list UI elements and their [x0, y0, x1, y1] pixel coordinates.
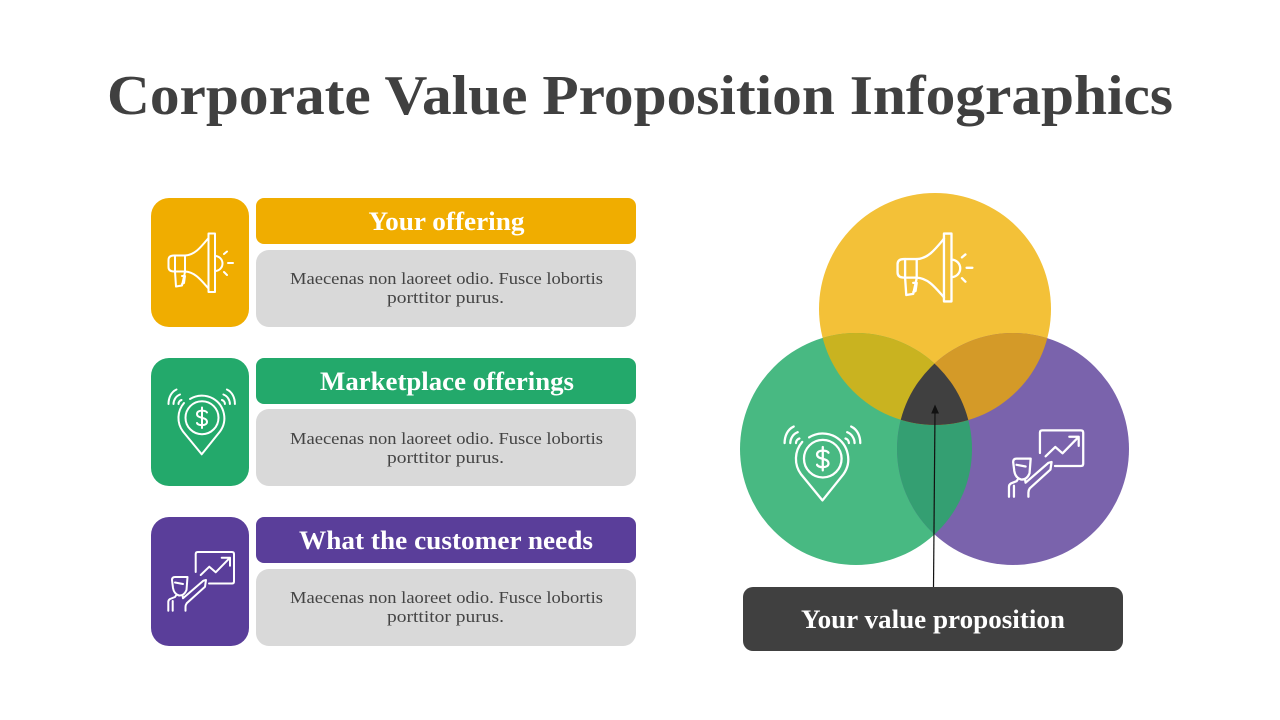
text block: your offering — [256, 250, 636, 327]
overlap: yellow and purple — [900, 333, 1048, 425]
panel: what the customer needs — [151, 517, 636, 646]
header: marketplace offerings: Marketplace offerings — [320, 367, 574, 396]
overlap: green and purple — [897, 420, 972, 534]
text block: what the customer needs: porttitor purus. — [387, 607, 504, 626]
icon: presenter with chart — [1009, 430, 1083, 497]
callout: your value proposition — [743, 587, 1123, 651]
text block: marketplace offerings — [256, 409, 636, 486]
venn diagram — [740, 193, 1129, 565]
header: your offering — [256, 198, 636, 244]
icon tile: presenter with chart — [151, 517, 249, 646]
icon: location pin with dollar — [785, 427, 860, 500]
header: what the customer needs — [256, 517, 636, 563]
text block: marketplace offerings: porttitor purus. — [387, 448, 504, 467]
callout: your value proposition: Your value proposition — [801, 605, 1066, 634]
circle: yellow — [819, 193, 1051, 425]
header: your offering: Your offering — [368, 207, 524, 236]
icon tile: location pin with dollar — [151, 358, 249, 486]
circle: purple — [897, 333, 1129, 565]
panel: marketplace offerings — [151, 358, 636, 486]
overlap: centre — [900, 364, 968, 425]
text block: marketplace offerings: Maecenas non laoreet odio. Fusce lobortis — [290, 429, 603, 448]
icon: megaphone — [898, 234, 972, 301]
arrow: to centre of venn — [931, 404, 939, 587]
overlap: yellow and green — [822, 333, 968, 425]
icon tile: megaphone — [151, 198, 249, 327]
text block: your offering: Maecenas non laoreet odio. Fusce lobortis — [290, 269, 603, 288]
header: marketplace offerings — [256, 358, 636, 404]
text block: what the customer needs — [256, 569, 636, 646]
panel: your offering — [151, 198, 636, 327]
text block: your offering: porttitor purus. — [387, 288, 504, 307]
circle: green — [740, 333, 972, 565]
title: Corporate Value Proposition Infographics — [107, 65, 1173, 127]
header: what the customer needs: What the customer needs — [299, 526, 593, 555]
text block: what the customer needs: Maecenas non laoreet odio. Fusce lobortis — [290, 588, 603, 607]
